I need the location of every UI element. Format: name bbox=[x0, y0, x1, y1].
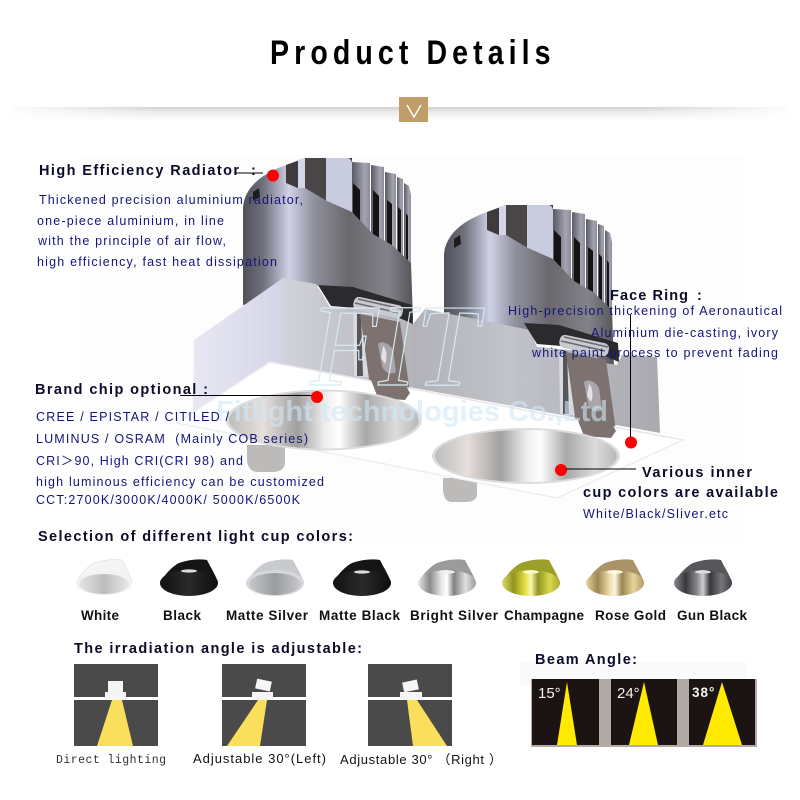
cup colour labels: Matte Silver bbox=[226, 608, 309, 623]
diagram: adjustable left bbox=[222, 664, 306, 746]
callout: high efficiency radiator: High Efficiency Radiator bbox=[39, 163, 239, 179]
cup: matte black bbox=[333, 559, 391, 596]
frame box bbox=[193, 278, 660, 433]
chart: beam angles bbox=[531, 679, 757, 747]
cup: black bbox=[160, 559, 218, 596]
beam 38 bbox=[689, 679, 755, 745]
cup colour labels: Gun Black bbox=[677, 608, 747, 623]
callout: face ring: white paint process to prevent fading bbox=[531, 346, 778, 360]
cup colour labels: White bbox=[81, 608, 119, 623]
cup: matte silver bbox=[246, 559, 304, 596]
reflector cups bbox=[226, 390, 620, 484]
cup: bright silver bbox=[418, 559, 476, 596]
callout: brand chip: LUMINUS / OSRAM (Mainly COB series) bbox=[36, 432, 308, 446]
divider shadow bbox=[30, 107, 770, 118]
callout: brand chip: CRI＞90, High CRI(CRI 98) and bbox=[36, 454, 243, 468]
callout: brand chip bbox=[35, 382, 324, 507]
cup: white bbox=[76, 559, 132, 595]
heading: irradiation angle: The irradiation angle is adjustable: bbox=[74, 641, 362, 657]
diagram: adjustable right bbox=[368, 664, 452, 746]
callout: face ring: High-precision thickening of Aeronautical bbox=[508, 304, 782, 318]
icon: chevron badge bbox=[399, 97, 428, 122]
heading: cup colors: Selection of different light cup colors: bbox=[38, 529, 353, 545]
clip tips over plate bbox=[371, 380, 616, 438]
beam 15 bbox=[532, 679, 599, 745]
callout: high efficiency radiator: high efficiency, fast heat dissipation bbox=[37, 255, 277, 269]
cup colour labels: Matte Black bbox=[319, 608, 400, 623]
beam 24: 24° bbox=[617, 685, 640, 702]
cup colour labels: Black bbox=[163, 608, 201, 623]
watermark text: Fitlight technologies Co.,Ltd bbox=[216, 396, 608, 428]
callout: high efficiency radiator bbox=[37, 163, 303, 269]
cup colour labels: Champagne bbox=[504, 608, 584, 623]
product image: double downlight bbox=[177, 158, 683, 502]
radiator housings bbox=[243, 158, 614, 367]
callout: inner cup colors: White/Black/Sliver.etc bbox=[583, 507, 728, 521]
callout: face ring: Aluminium die-casting, ivory bbox=[591, 326, 779, 340]
title: Product Details bbox=[270, 34, 551, 72]
callout: face ring: Face Ring bbox=[610, 288, 688, 304]
callout: high efficiency radiator: : bbox=[251, 163, 256, 179]
callout: face ring bbox=[508, 288, 782, 448]
callout: inner cup colors: Various inner bbox=[642, 465, 752, 481]
face plate bbox=[177, 362, 683, 498]
heading: beam angle: Beam Angle: bbox=[535, 652, 637, 668]
diagram: direct lighting bbox=[74, 664, 158, 746]
cup: gun black bbox=[674, 559, 732, 596]
callout: high efficiency radiator: one-piece aluminium, in line bbox=[37, 214, 224, 228]
cup: rose gold bbox=[586, 559, 644, 596]
callout: high efficiency radiator: with the principle of air flow, bbox=[37, 234, 226, 248]
caption: adjustable left: Adjustable 30°(Left) bbox=[193, 751, 326, 766]
callout: inner cup colors bbox=[555, 464, 778, 521]
beam 15: 15° bbox=[538, 685, 561, 702]
cup swatches bbox=[76, 559, 732, 596]
cup colour labels: Rose Gold bbox=[595, 608, 666, 623]
cup colour labels bbox=[81, 608, 747, 623]
mounting tabs bbox=[247, 445, 477, 502]
beam 24 bbox=[611, 679, 677, 745]
beam 38: 38° bbox=[692, 685, 715, 700]
callout: face ring: : bbox=[697, 288, 702, 304]
cup: champagne bbox=[502, 559, 560, 596]
callout: brand chip: CCT:2700K/3000K/4000K/ 5000K/6500K bbox=[36, 493, 301, 507]
caption: direct lighting: Direct lighting bbox=[56, 754, 166, 767]
callout: brand chip: CREE / EPISTAR / CITILED / bbox=[36, 410, 230, 424]
callout: high efficiency radiator: Thickened precision aluminium radiator, bbox=[39, 193, 303, 207]
callout: brand chip: high luminous efficiency can be customized bbox=[36, 475, 324, 489]
cup colour labels: Bright Silver bbox=[410, 608, 499, 623]
spring clips bbox=[318, 285, 619, 438]
watermark logo: FIT bbox=[309, 280, 485, 411]
callout: brand chip: Brand chip optional : bbox=[35, 382, 208, 398]
callout: inner cup colors: cup colors are available bbox=[583, 485, 778, 501]
caption: adjustable right: Adjustable 30° （Right ） bbox=[340, 752, 502, 767]
